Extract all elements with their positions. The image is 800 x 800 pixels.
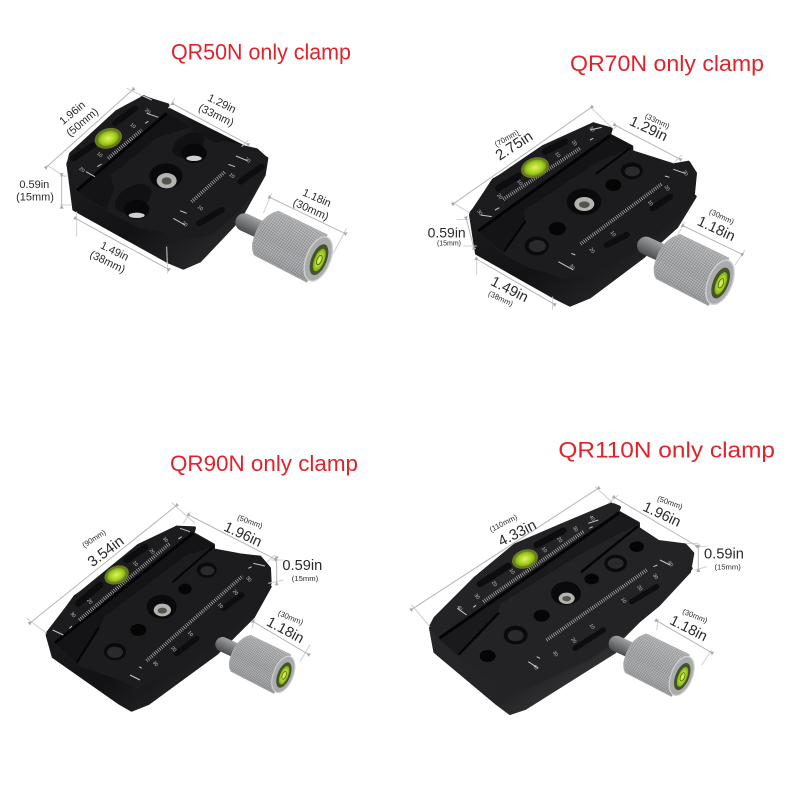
- dimensions: QR110N: (15mm): [714, 562, 741, 571]
- dimensions: QR50N: (30mm): [291, 197, 330, 223]
- dimensions: QR70N: (15mm): [437, 240, 461, 247]
- clamp body: QR90N: 10: [131, 560, 139, 568]
- clamp body: QR90N: 30: [151, 660, 159, 668]
- dimensions: QR50N: 1.96in: [57, 99, 88, 128]
- clamp body: QR90N: 10: [186, 630, 194, 638]
- icon: knurled knob: [244, 212, 338, 285]
- clamp body: QR110N: 20: [555, 536, 564, 544]
- panel: QR70N clamp: [428, 51, 764, 310]
- dimensions: QR70N: 1.18in: [695, 214, 737, 245]
- clamp body: QR70N: 30: [475, 209, 484, 217]
- clamp body: QR70N: 20: [570, 139, 578, 148]
- clamp body: QR70N: 30: [568, 263, 576, 272]
- clamp body: QR50N: 20: [143, 108, 152, 116]
- clamp body: QR110N: 40: [588, 514, 596, 523]
- dimensions: QR90N: 1.96in: [221, 519, 264, 551]
- clamp body: QR50N: 20: [180, 220, 189, 229]
- dimensions: QR50N: 1.29in: [206, 92, 238, 116]
- clamp body: QR70N: 20: [495, 193, 504, 201]
- dimensions: QR110N: (110mm): [488, 512, 519, 534]
- clamp body: QR90N: 20: [231, 589, 239, 597]
- clamp body: QR90N: 30: [244, 575, 253, 584]
- clamp body: QR110N: [431, 504, 693, 713]
- icon: knurled knob: [223, 636, 300, 696]
- panel: QR50N clamp: [16, 39, 351, 285]
- clamp body: QR110N: 20: [635, 584, 644, 593]
- panel: QR90N clamp: [27, 451, 358, 710]
- title: QR50N: QR50N only clamp: [171, 39, 351, 64]
- dimensions: QR50N: (50mm): [64, 106, 101, 139]
- title: QR70N: QR70N only clamp: [570, 51, 764, 76]
- clamp body: QR70N: 10: [646, 199, 654, 208]
- clamp body: QR50N: 10: [129, 122, 137, 130]
- clamp body: QR50N: 20: [78, 166, 86, 174]
- clamp body: QR50N: 10: [95, 151, 104, 159]
- clamp body: QR90N: [47, 527, 270, 710]
- icon: knurled knob: [646, 235, 740, 308]
- dimensions: QR50N: (33mm): [196, 102, 236, 129]
- clamp body: QR110N: 10: [588, 623, 596, 631]
- clamp body: QR90N: 20: [85, 598, 94, 606]
- dimensions: QR90N: (50mm): [236, 513, 264, 531]
- clamp body: QR70N: [471, 124, 695, 305]
- clamp body: QR90N: 20: [148, 548, 156, 556]
- dimensions: QR110N: (50mm): [656, 494, 684, 512]
- clamp body: QR110N: 30: [473, 593, 481, 601]
- clamp body: QR50N: 20: [243, 157, 252, 165]
- clamp body: QR50N: [68, 97, 267, 268]
- dimensions: QR90N: 3.54in: [85, 533, 127, 571]
- clamp body: QR110N: 10: [540, 546, 548, 554]
- dimensions: QR50N: (15mm): [16, 192, 54, 204]
- clamp body: QR110N: 40: [455, 604, 464, 613]
- clamp body: QR90N: 20: [169, 645, 178, 654]
- dimensions: QR70N: (33mm): [643, 111, 672, 131]
- dimensions: QR90N: 1.18in: [264, 614, 306, 647]
- dimensions: QR110N: 0.59in: [704, 546, 744, 562]
- clamp body: QR110N: 30: [651, 573, 659, 581]
- clamp body: QR90N: 30: [69, 611, 77, 619]
- title: QR90N: QR90N only clamp: [170, 451, 358, 476]
- dimensions: QR70N: 0.59in: [428, 225, 466, 241]
- dimensions: QR110N: (30mm): [681, 607, 709, 625]
- dimensions: QR70N: 2.75in: [493, 128, 536, 164]
- title: QR110N: QR110N only clamp: [558, 437, 775, 462]
- icon: knurled knob: [617, 634, 699, 699]
- clamp body: QR70N: 10: [515, 179, 524, 187]
- dimensions: QR50N: 1.49in: [98, 240, 130, 264]
- clamp body: QR110N: 30: [571, 525, 579, 534]
- clamp body: QR110N: 40: [666, 560, 674, 568]
- dimensions: QR110N: [412, 487, 744, 665]
- clamp body: QR70N: 10: [609, 230, 617, 238]
- dimensions: QR70N: (30mm): [708, 207, 736, 227]
- clamp body: QR70N: 30: [588, 125, 596, 134]
- clamp body: QR70N: 30: [681, 169, 689, 178]
- clamp body: QR70N: 20: [588, 247, 596, 255]
- dimensions: QR50N: 1.18in: [301, 187, 333, 210]
- clamp body: QR110N: 20: [569, 637, 578, 645]
- clamp body: QR110N: 10: [619, 597, 628, 605]
- dimensions: QR50N: (38mm): [88, 249, 127, 276]
- clamp body: QR70N: 20: [663, 184, 671, 193]
- clamp body: QR110N: 10: [508, 568, 516, 576]
- clamp body: QR90N: 10: [216, 602, 224, 610]
- dimensions: QR90N: (15mm): [292, 574, 319, 583]
- dimensions: QR70N: [428, 107, 745, 310]
- dimensions: QR110N: 1.96in: [640, 499, 683, 531]
- dimensions: QR50N: [16, 88, 347, 276]
- clamp body: QR70N: 10: [553, 151, 562, 159]
- dimensions: QR110N: 4.33in: [495, 516, 539, 550]
- dimensions: QR70N: (70mm): [493, 128, 521, 149]
- clamp body: QR110N: 30: [551, 650, 559, 658]
- dimensions: QR90N: (30mm): [277, 609, 305, 627]
- dimensions: QR90N: 0.59in: [282, 558, 322, 574]
- dimensions: QR50N: 0.59in: [19, 179, 49, 191]
- dimensions: QR90N: (90mm): [80, 527, 108, 550]
- panel: QR110N clamp: [412, 437, 775, 713]
- dimensions: QR70N: 1.49in: [488, 274, 531, 306]
- dimensions: QR70N: (38mm): [487, 289, 515, 309]
- clamp body: QR50N: 10: [228, 172, 236, 180]
- dimensions: QR90N: [27, 503, 322, 662]
- dimensions: QR70N: 1.29in: [627, 114, 670, 145]
- clamp body: QR110N: 20: [490, 580, 498, 588]
- dimensions: QR110N: 1.18in: [667, 613, 710, 645]
- clamp body: QR110N: 40: [531, 663, 539, 672]
- clamp body: QR90N: 30: [161, 536, 169, 544]
- clamp body: QR50N: 10: [196, 204, 204, 213]
